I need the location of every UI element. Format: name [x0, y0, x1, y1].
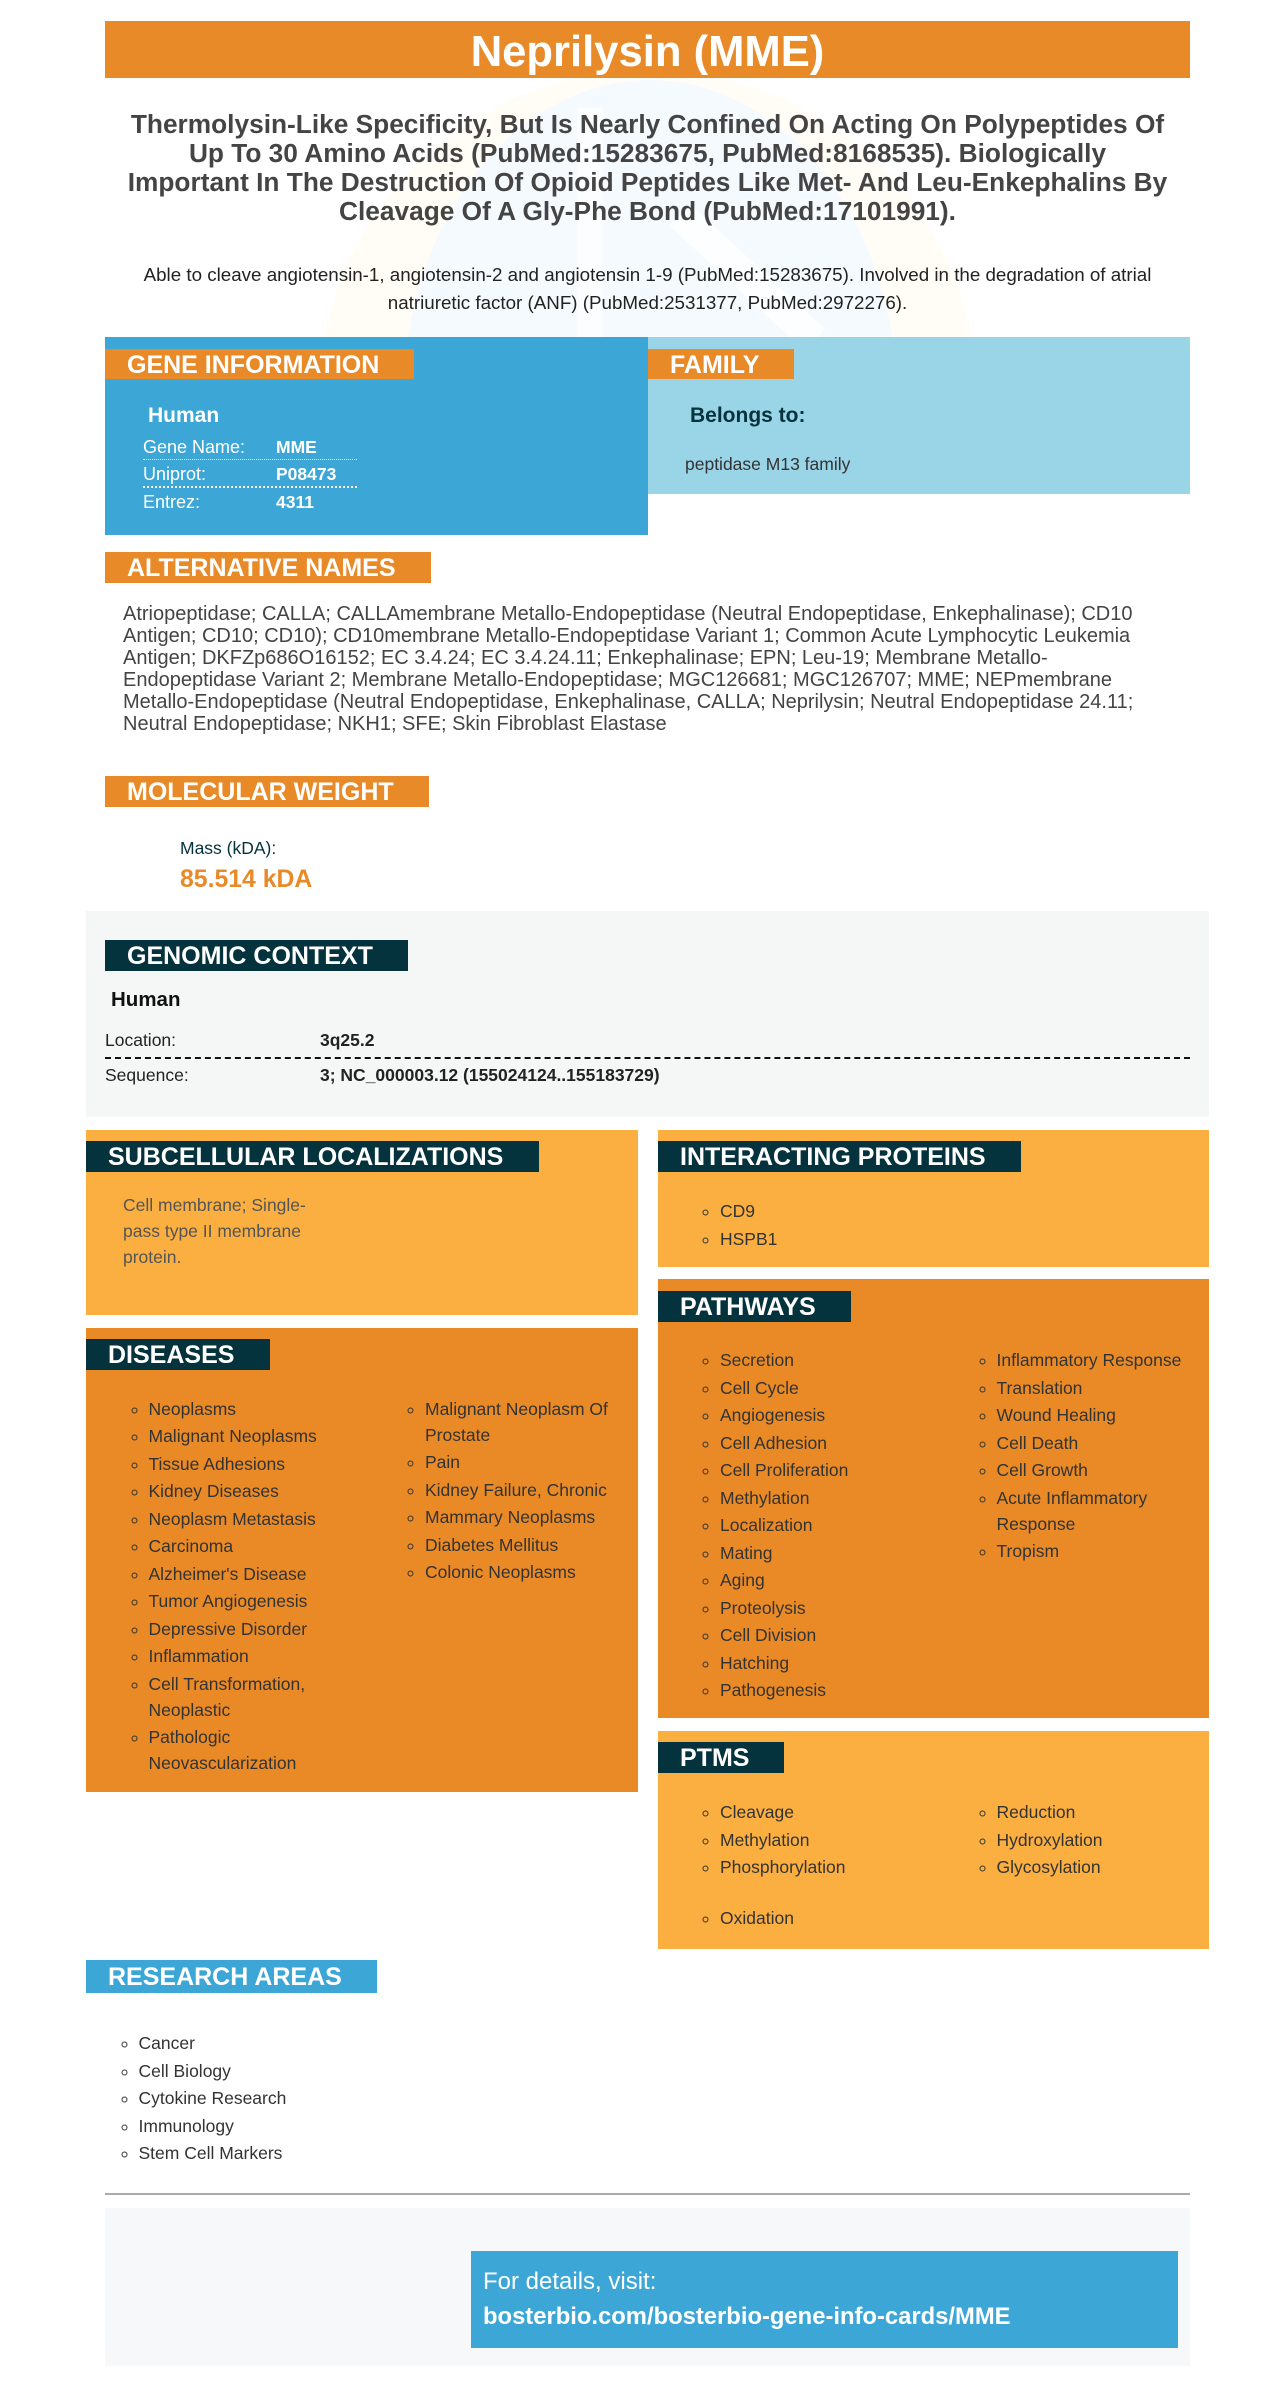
pathway list column 2: Cell Growth — [996, 1460, 1088, 1480]
disease list column 1: Neoplasm Metastasis — [148, 1508, 316, 1528]
title — [105, 21, 1190, 78]
disease list column 2: Colonic Neoplasms — [425, 1562, 576, 1582]
description paragraph: Able to cleave angiotensin-1, angiotensin-2 and angiotensin 1-9 (PubMed:15283675). Involved in the degradation of atrial — [144, 264, 1151, 285]
footer panel — [105, 2208, 1190, 2366]
research list: Cancer — [138, 2033, 195, 2053]
pathway list column 1: Methylation — [720, 1488, 810, 1508]
alternative names text: Neutral Endopeptidase; NKH1; SFE; Skin Fibroblast Elastase — [123, 713, 667, 735]
call to action box — [471, 2251, 1178, 2348]
subtitle heading: Up To 30 Amino Acids (PubMed:15283675, PubMed:8168535). Biologically — [189, 138, 1106, 168]
disease list column 1: Carcinoma — [148, 1536, 233, 1556]
section: molecular weight — [105, 776, 429, 893]
alternative names text: Antigen; CD10; CD10); CD10membrane Metallo-Endopeptidase Variant 1; Common Acute Lymphocytic Leukemia — [123, 625, 1130, 647]
localization text: Cell membrane; Single- — [123, 1195, 306, 1215]
research list — [122, 2033, 286, 2163]
disease list column 2: Malignant Neoplasm Of — [425, 1398, 608, 1418]
pathway list column 1: Mating — [720, 1542, 773, 1562]
title: Neprilysin (MME) — [471, 28, 824, 76]
ptm list column 2: Reduction — [996, 1802, 1075, 1822]
pathway list column 1: Angiogenesis — [720, 1405, 825, 1425]
entrez row: Entrez: — [143, 492, 200, 512]
description paragraph — [144, 264, 1151, 313]
belongs to label: Belongs to: — [690, 404, 806, 427]
ptm list column 2 — [980, 1802, 1103, 1877]
research list: Stem Cell Markers — [138, 2143, 282, 2163]
disease list column 1: Neoplastic — [148, 1700, 230, 1720]
heading: ptms: PTMS — [680, 1744, 749, 1772]
subtitle heading: Important In The Destruction Of Opioid Peptides Like Met- And Leu-Enkephalins By — [128, 167, 1167, 197]
panel: diseases — [86, 1328, 638, 1792]
subtitle heading — [128, 109, 1168, 226]
ptm list column 1: Methylation — [720, 1830, 810, 1850]
panel: genomic context — [86, 911, 1209, 1117]
disease list column 1: Pathologic — [148, 1727, 230, 1747]
research list: Immunology — [138, 2116, 234, 2136]
alternative names text: Metallo-Endopeptidase (Neutral Endopeptidase, Enkephalinase, CALLA; Neprilysin; Neutral Endopeptidase 24.11; — [123, 691, 1133, 713]
section: research areas — [86, 1960, 377, 2163]
panel: family — [648, 337, 1190, 494]
pathway list column 1: Aging — [720, 1570, 765, 1590]
background watermark logo — [324, 78, 972, 337]
section: alternative names — [105, 552, 1133, 735]
location row: Location: — [105, 1030, 176, 1050]
panel: subcellular localizations — [86, 1130, 638, 1315]
pathway list column 2: Response — [996, 1514, 1075, 1534]
protein list: CD9 — [720, 1201, 755, 1221]
disease list column 1: Tissue Adhesions — [148, 1454, 285, 1474]
species label: Human — [111, 988, 180, 1011]
heading: research areas: RESEARCH AREAS — [108, 1963, 342, 1991]
panel: gene information — [105, 337, 648, 535]
alternative names text: Atriopeptidase; CALLA; CALLAmembrane Metallo-Endopeptidase (Neutral Endopeptidase, Enkephalinase); CD10 — [123, 603, 1132, 625]
pathway list column 1: Localization — [720, 1515, 812, 1535]
disease list column 1: Neovascularization — [148, 1753, 296, 1773]
details link: bosterbio.com/bosterbio-gene-info-cards/MME — [483, 2303, 1011, 2330]
disease list column 1: Malignant Neoplasms — [148, 1426, 317, 1446]
heading: family — [648, 349, 794, 379]
sequence row: 3; NC_000003.12 (155024124..155183729) — [320, 1065, 660, 1085]
disease list column 1: Alzheimer's Disease — [148, 1564, 306, 1584]
heading: interacting proteins: INTERACTING PROTEINS — [680, 1143, 986, 1171]
uniprot row: Uniprot: — [143, 464, 206, 484]
pathway list column 2: Acute Inflammatory — [996, 1488, 1147, 1508]
entrez row — [143, 492, 314, 512]
ptm list column 1 — [702, 1802, 846, 1928]
pathway list column 2: Wound Healing — [996, 1405, 1116, 1425]
disease list column 2 — [408, 1398, 608, 1582]
pathway list column 2: Tropism — [996, 1541, 1059, 1561]
species label: Human — [148, 404, 219, 427]
details label: For details, visit: — [483, 2268, 656, 2295]
disease list column 2: Prostate — [425, 1424, 490, 1444]
heading: alternative names: ALTERNATIVE NAMES — [127, 554, 396, 582]
pathway list column 2: Inflammatory Response — [996, 1350, 1181, 1370]
disease list column 1: Inflammation — [148, 1646, 249, 1666]
pathway list column 2: Translation — [996, 1378, 1082, 1398]
pathway list column 1: Hatching — [720, 1652, 789, 1672]
subtitle heading: Cleavage Of A Gly-Phe Bond (PubMed:17101991). — [339, 196, 956, 226]
uniprot row: P08473 — [276, 464, 336, 484]
localization text: protein. — [123, 1247, 181, 1267]
sequence row — [105, 1065, 660, 1085]
gene name row: Gene Name: — [143, 437, 245, 457]
ptm list column 1: Phosphorylation — [720, 1857, 846, 1877]
location row: 3q25.2 — [320, 1030, 374, 1050]
panel: ptms — [658, 1731, 1209, 1949]
gene name row: MME — [276, 437, 317, 457]
heading: gene information: GENE INFORMATION — [127, 351, 379, 379]
disease list column 2: Pain — [425, 1452, 460, 1472]
localization text: pass type II membrane — [123, 1221, 301, 1241]
heading: family: FAMILY — [670, 351, 759, 379]
pathway list column 1: Cell Cycle — [720, 1378, 799, 1398]
ptm list column 1: Oxidation — [720, 1908, 794, 1928]
heading: pathways — [658, 1291, 851, 1322]
disease list column 2: Mammary Neoplasms — [425, 1507, 595, 1527]
heading: molecular weight: MOLECULAR WEIGHT — [127, 778, 394, 806]
family value: peptidase M13 family — [685, 454, 850, 474]
research list: Cytokine Research — [138, 2088, 286, 2108]
heading: subcellular localizations: SUBCELLULAR LOCALIZATIONS — [108, 1143, 503, 1171]
ptm list column 2: Glycosylation — [996, 1857, 1101, 1877]
disease list column 2: Diabetes Mellitus — [425, 1534, 558, 1554]
mass label: Mass (kDA): — [180, 838, 276, 858]
mass value: 85.514 kDA — [180, 866, 312, 893]
alternative names text: Endopeptidase Variant 2; Membrane Metallo-Endopeptidase; MGC126681; MGC126707; MME; NEPmembrane — [123, 669, 1112, 691]
sequence row: Sequence: — [105, 1065, 189, 1085]
heading: pathways: PATHWAYS — [680, 1293, 816, 1321]
pathway list column 1: Pathogenesis — [720, 1680, 826, 1700]
heading: diseases — [86, 1339, 270, 1370]
disease list column 1: Neoplasms — [148, 1398, 236, 1418]
location row — [105, 1027, 1190, 1059]
subtitle heading: Thermolysin-Like Specificity, But Is Nearly Confined On Acting On Polypeptides Of — [131, 109, 1164, 139]
localization text — [123, 1195, 306, 1267]
disease list column 1: Kidney Diseases — [148, 1481, 279, 1501]
entrez row: 4311 — [276, 492, 314, 512]
pathway list column 1: Secretion — [720, 1350, 794, 1370]
pathway list column 2 — [980, 1350, 1181, 1561]
panel: interacting proteins — [658, 1130, 1209, 1267]
alternative names text — [123, 603, 1133, 735]
research list: Cell Biology — [138, 2060, 231, 2080]
heading: research areas — [86, 1960, 377, 1993]
gene name row — [143, 434, 357, 460]
ptm list column 1: Cleavage — [720, 1802, 794, 1822]
uniprot row — [143, 461, 357, 488]
pathway list column 1: Proteolysis — [720, 1598, 806, 1618]
protein list — [702, 1201, 777, 1248]
heading: genomic context: GENOMIC CONTEXT — [127, 942, 373, 970]
ptm list column 2: Hydroxylation — [996, 1830, 1103, 1850]
heading: diseases: DISEASES — [108, 1341, 234, 1369]
description paragraph: natriuretic factor (ANF) (PubMed:2531377, PubMed:2972276). — [388, 292, 907, 313]
disease list column 1: Cell Transformation, — [148, 1674, 305, 1694]
pathway list column 1 — [702, 1350, 848, 1700]
panel: pathways — [658, 1279, 1209, 1718]
disease list column 1: Tumor Angiogenesis — [148, 1591, 307, 1611]
pathway list column 1: Cell Proliferation — [720, 1460, 848, 1480]
disease list column 1: Depressive Disorder — [148, 1618, 307, 1638]
pathway list column 1: Cell Division — [720, 1625, 816, 1645]
disease list column 1 — [132, 1398, 317, 1773]
alternative names text: Antigen; DKFZp686O16152; EC 3.4.24; EC 3.4.24.11; Enkephalinase; EPN; Leu-19; Membrane Metallo- — [123, 647, 1048, 669]
heading: ptms — [658, 1742, 784, 1773]
disease list column 2: Kidney Failure, Chronic — [425, 1480, 607, 1500]
pathway list column 2: Cell Death — [996, 1432, 1078, 1452]
protein list: HSPB1 — [720, 1228, 777, 1248]
pathway list column 1: Cell Adhesion — [720, 1432, 827, 1452]
